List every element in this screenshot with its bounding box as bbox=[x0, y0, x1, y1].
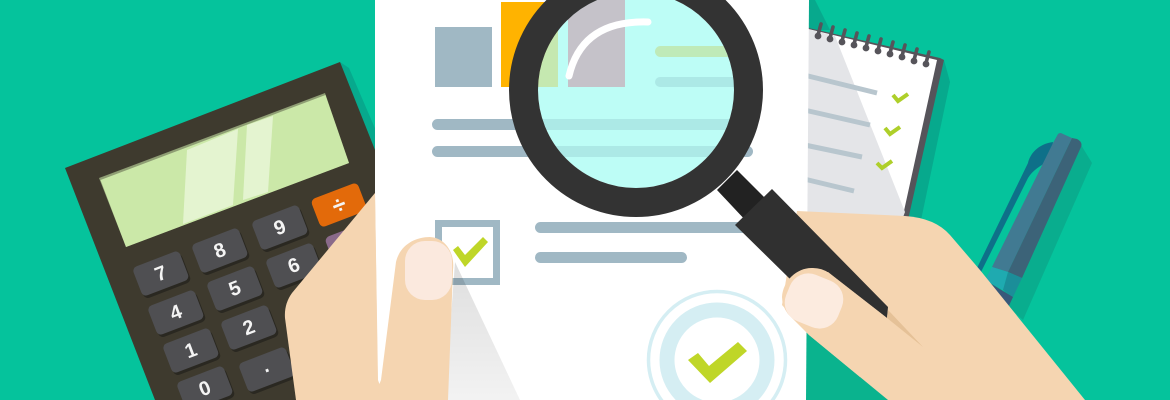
approval stamp bbox=[648, 292, 786, 400]
magnifying glass bbox=[509, 0, 764, 218]
calculator keys: 7 bbox=[152, 262, 170, 286]
notepad bbox=[800, 0, 950, 225]
notepad check marks bbox=[877, 94, 908, 168]
calculator screen bbox=[99, 93, 349, 247]
handle neck bbox=[717, 170, 764, 218]
palm crease bbox=[887, 310, 923, 347]
calculator keys: 8 bbox=[211, 239, 229, 263]
calculator keys: 4 bbox=[167, 300, 186, 325]
left hand bbox=[285, 193, 453, 400]
document text lines bbox=[432, 119, 753, 263]
finger shadow bbox=[445, 262, 520, 400]
calculator keys: 2 bbox=[240, 316, 258, 340]
notepad rings bbox=[816, 24, 929, 66]
calculator keys bbox=[132, 182, 382, 400]
checkbox with tick bbox=[438, 224, 496, 282]
paper edge shadow bbox=[804, 330, 890, 400]
calculator keys: . bbox=[259, 355, 272, 378]
lens bbox=[538, 0, 734, 188]
calculator keys: 1 bbox=[182, 339, 200, 363]
calculator keys: 5 bbox=[226, 277, 244, 301]
finger bbox=[378, 237, 453, 400]
document paper bbox=[375, 0, 809, 400]
right hand bbox=[735, 189, 1085, 400]
thumb bbox=[782, 268, 887, 377]
calculator keys: 9 bbox=[271, 216, 289, 240]
calculator keys: ÷ bbox=[328, 191, 350, 220]
magnifier grip bbox=[735, 189, 888, 318]
notepad text lines bbox=[800, 74, 877, 191]
pen bbox=[975, 133, 1092, 320]
calculator keys: 6 bbox=[285, 254, 303, 278]
calculator bbox=[65, 62, 385, 400]
document chart blocks bbox=[435, 2, 590, 87]
lens ring bbox=[524, 0, 748, 202]
